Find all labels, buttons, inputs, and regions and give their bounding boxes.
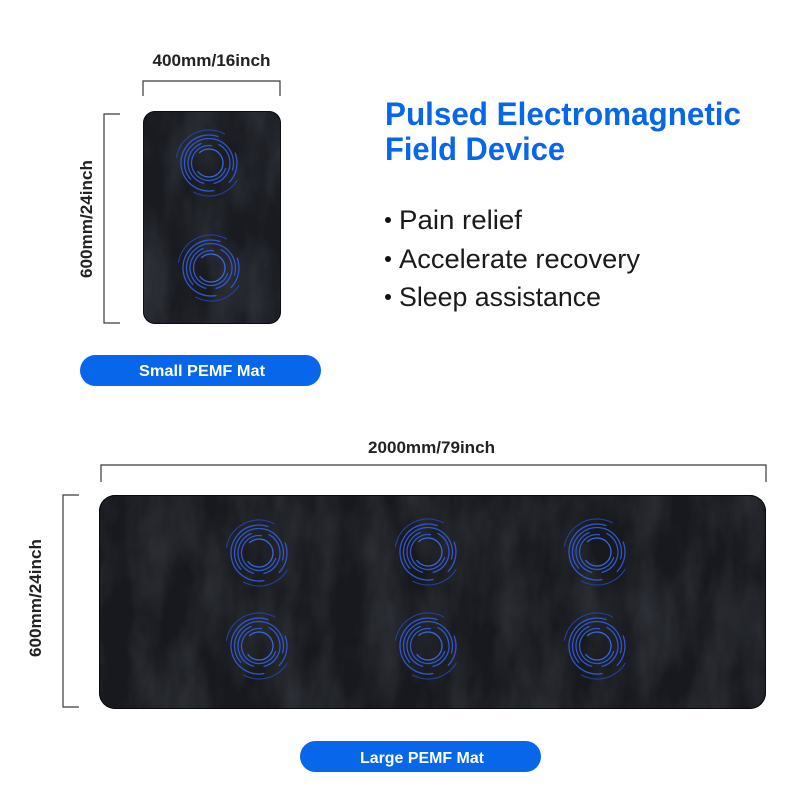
small mat height dimension bbox=[78, 114, 120, 323]
large mat width dimension: 2000mm/79inch bbox=[368, 439, 495, 457]
title bbox=[385, 96, 741, 167]
small mat label bbox=[80, 355, 321, 386]
benefits list: Accelerate recovery bbox=[399, 244, 640, 274]
small PEMF mat bbox=[143, 111, 281, 324]
small mat width dimension bbox=[143, 52, 280, 96]
large mat height dimension: 600mm/24inch bbox=[27, 539, 45, 657]
small mat height dimension: 600mm/24inch bbox=[78, 160, 96, 278]
title: Pulsed Electromagnetic bbox=[385, 96, 741, 132]
small mat coil bottom bbox=[173, 230, 249, 306]
large mat width dimension bbox=[101, 439, 766, 482]
benefits list: Pain relief bbox=[399, 205, 522, 235]
small mat label: Small PEMF Mat bbox=[139, 363, 266, 380]
small mat width dimension: 400mm/16inch bbox=[152, 52, 270, 70]
large mat coils bbox=[221, 514, 635, 684]
benefits list: Sleep assistance bbox=[399, 282, 601, 312]
benefits list bbox=[385, 205, 640, 312]
title: Field Device bbox=[385, 131, 565, 167]
large PEMF mat bbox=[99, 495, 766, 709]
large mat label bbox=[300, 741, 541, 772]
large mat label: Large PEMF Mat bbox=[360, 750, 485, 767]
small mat coil top bbox=[171, 125, 247, 201]
large mat height dimension bbox=[27, 495, 79, 707]
